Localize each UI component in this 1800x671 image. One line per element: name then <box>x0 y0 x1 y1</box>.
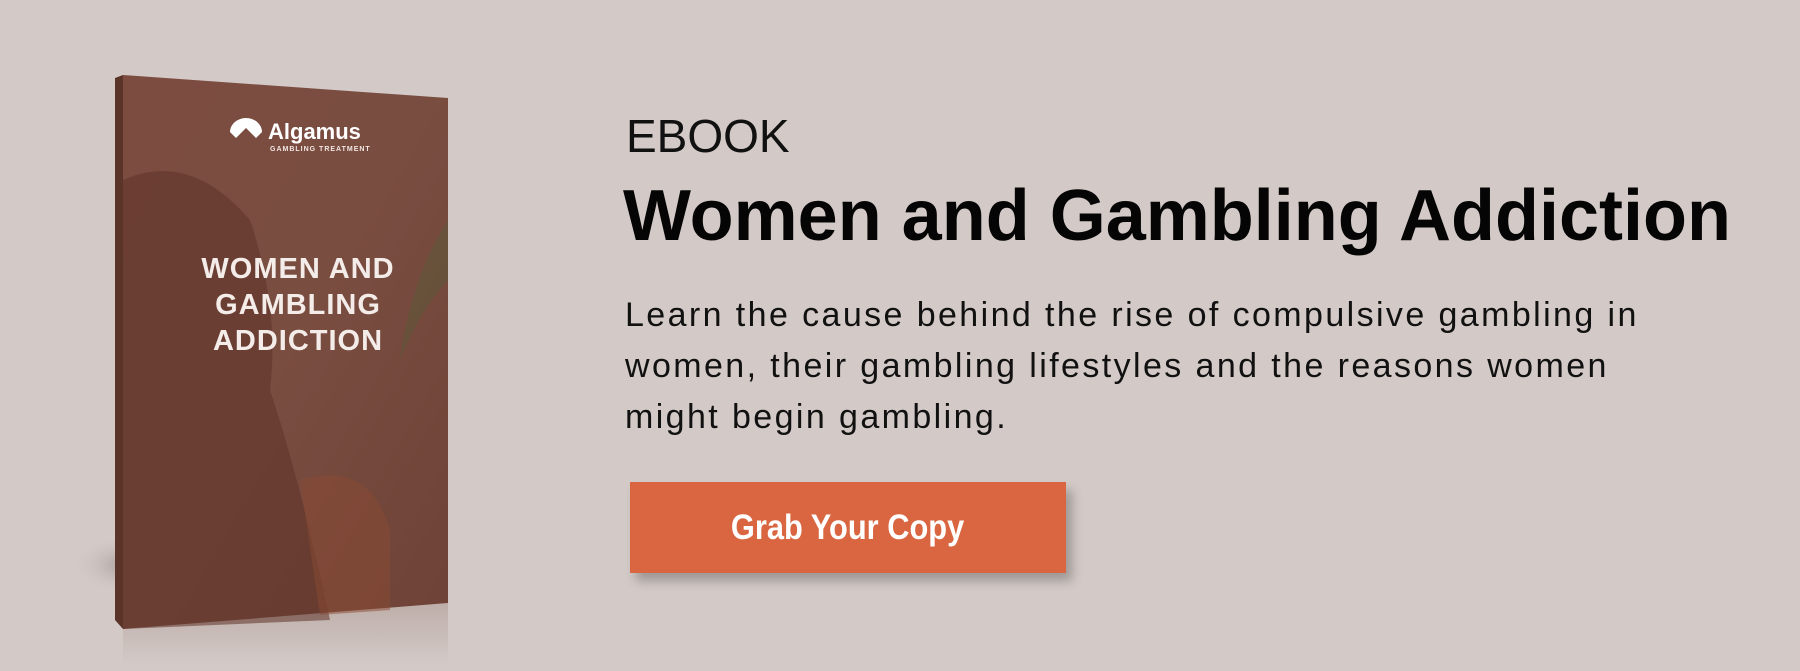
title: Women and Gambling Addiction <box>623 176 1731 256</box>
cover title: GAMBLING <box>215 289 381 321</box>
logo: Algamus <box>268 119 361 144</box>
reflection <box>123 603 448 666</box>
description: might begin gambling. <box>625 398 1008 436</box>
description: women, their gambling lifestyles and the reasons women <box>625 347 1609 385</box>
spine <box>115 75 123 629</box>
cover title: WOMEN AND <box>201 253 395 285</box>
eyebrow: EBOOK: EBOOK <box>626 110 790 162</box>
button: Grab Your Copy <box>630 482 1066 573</box>
front face <box>123 75 448 629</box>
button: Grab Your Copy: Grab Your Copy <box>731 508 965 546</box>
description <box>625 296 1639 436</box>
cover title <box>201 253 395 357</box>
cover title: ADDICTION <box>213 325 383 357</box>
book cover <box>94 75 448 648</box>
description: Learn the cause behind the rise of compulsive gambling in <box>625 296 1639 334</box>
logo: GAMBLING TREATMENT <box>270 146 371 153</box>
logo <box>230 118 371 153</box>
